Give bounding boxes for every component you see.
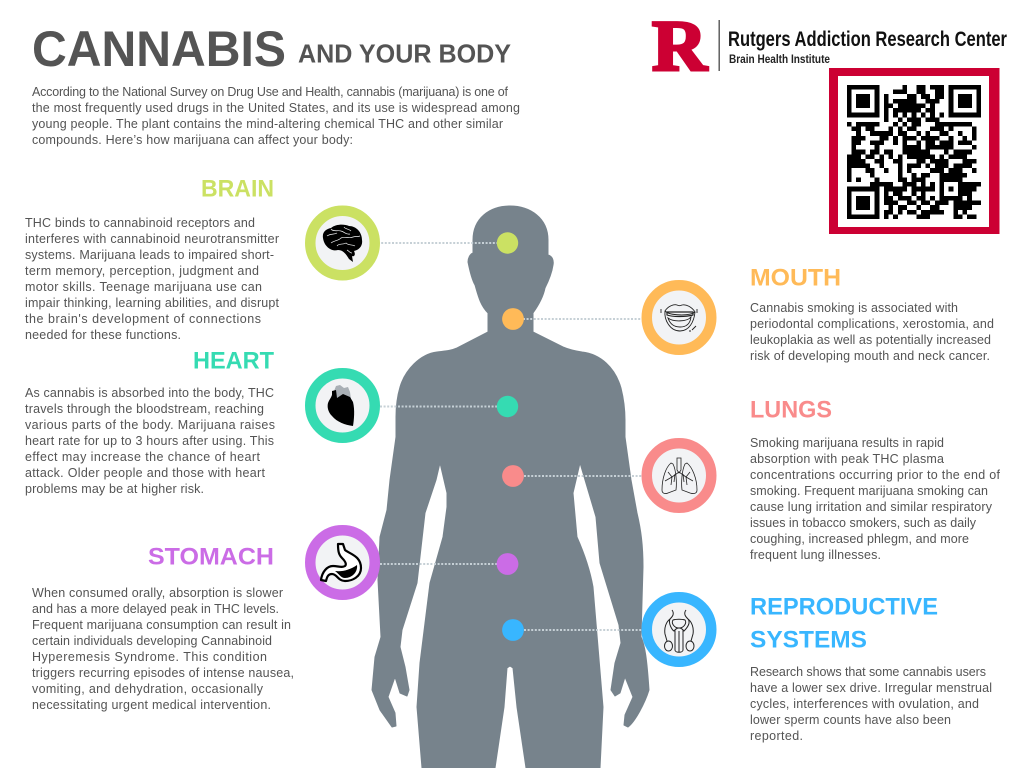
heading: mouth: MOUTH bbox=[750, 264, 841, 292]
title: AND YOUR BODY bbox=[298, 38, 511, 68]
text: heart: travels through the bloodstream, reaching bbox=[25, 402, 264, 416]
icon: mouth bbox=[647, 285, 711, 350]
intro text: compounds. Here’s how marijuana can affect your body: bbox=[32, 133, 353, 147]
text: brain: needed for these functions. bbox=[25, 328, 181, 342]
body marker: stomach bbox=[497, 553, 518, 575]
body marker: heart bbox=[497, 396, 518, 417]
text: brain: motor skills. Teenage marijuana use can bbox=[25, 280, 262, 294]
connector: mouth bbox=[523, 318, 642, 320]
intro text bbox=[32, 85, 520, 147]
text: lungs: absorption with peak THC plasma bbox=[750, 452, 944, 466]
text: lungs: smoking. Frequent marijuana smoking can bbox=[750, 484, 988, 498]
text: stomach bbox=[32, 586, 294, 712]
logo: Rutgers: Brain Health Institute bbox=[729, 52, 830, 66]
icon: brain bbox=[310, 211, 375, 275]
text: heart: problems may be at higher risk. bbox=[25, 482, 204, 496]
panel: brain bbox=[25, 176, 280, 342]
text: reproductive systems: Research shows that some cannabis users bbox=[750, 665, 986, 679]
text: lungs: issues in tobacco smokers, such as daily bbox=[750, 516, 977, 530]
text: brain: THC binds to cannabinoid receptors and bbox=[25, 216, 255, 230]
icon: heart bbox=[310, 373, 375, 438]
text: lungs: concentrations occurring prior to the end of bbox=[750, 468, 1001, 482]
text: mouth: leukoplakia as well as potentially increased bbox=[750, 333, 991, 347]
heading: stomach: STOMACH bbox=[148, 544, 274, 570]
text: heart: various parts of the body. Marijuana raises bbox=[25, 418, 275, 432]
heading: heart: HEART bbox=[193, 348, 274, 374]
connector: stomach bbox=[380, 563, 497, 565]
text: mouth bbox=[750, 301, 994, 363]
heading: reproductive systems: SYSTEMS bbox=[750, 626, 867, 654]
text: brain: term memory, perception, judgment and bbox=[25, 264, 259, 278]
text: mouth: Cannabis smoking is associated with bbox=[750, 301, 958, 315]
panel: lungs bbox=[750, 396, 1001, 562]
logo: Rutgers: R bbox=[652, 6, 708, 86]
body marker: brain bbox=[497, 232, 518, 254]
QR code bbox=[829, 68, 1000, 234]
body marker: lungs bbox=[502, 465, 524, 487]
heading: reproductive systems: REPRODUCTIVE bbox=[750, 594, 938, 620]
connector: heart bbox=[380, 406, 497, 408]
text: brain: systems. Marijuana leads to impaired short- bbox=[25, 248, 274, 262]
text: reproductive systems: cycles, interferences with ovulation, and bbox=[750, 697, 979, 711]
icon: reproductive bbox=[647, 597, 711, 662]
panel: stomach bbox=[32, 544, 294, 712]
text: heart: As cannabis is absorbed into the body, THC bbox=[25, 386, 274, 400]
text: reproductive systems: lower sperm counts have also been bbox=[750, 713, 951, 727]
text: reproductive systems: reported. bbox=[750, 729, 803, 743]
text: brain: the brain's development of connections bbox=[25, 312, 261, 326]
logo: Rutgers bbox=[652, 6, 1007, 86]
text: heart: effect may increase the chance of heart bbox=[25, 450, 261, 464]
text: stomach: Hyperemesis Syndrome. This condition bbox=[32, 650, 267, 664]
icon: stomach bbox=[310, 530, 375, 595]
panel: heart bbox=[25, 348, 275, 496]
text: lungs: coughing, increased phlegm, and more bbox=[750, 532, 969, 546]
text: stomach: necessitating urgent medical intervention. bbox=[32, 698, 271, 712]
panel: reproductive systems bbox=[750, 594, 992, 743]
text: stomach: When consumed orally, absorption is slower bbox=[32, 586, 283, 600]
text: reproductive systems: have a lower sex drive. Irregular menstrual bbox=[750, 681, 992, 695]
heading: lungs: LUNGS bbox=[750, 396, 832, 424]
panel: mouth bbox=[750, 264, 994, 363]
heading: reproductive systems bbox=[750, 594, 938, 654]
intro text: According to the National Survey on Drug Use and Health, cannabis (marijuana) is one of bbox=[32, 85, 509, 99]
text: stomach: triggers recurring episodes of intense nausea, bbox=[32, 666, 294, 680]
text: heart bbox=[25, 386, 275, 496]
text: lungs: cause lung irritation and similar respiratory bbox=[750, 500, 993, 514]
body silhouette bbox=[372, 206, 649, 768]
text: heart: heart rate for up to 3 hours after using. This bbox=[25, 434, 274, 448]
body marker: mouth bbox=[502, 308, 524, 330]
text: mouth: periodontal complications, xerostomia, and bbox=[750, 317, 994, 331]
connector: brain bbox=[313, 240, 497, 246]
connector: lungs bbox=[524, 475, 642, 477]
text: brain: impair thinking, learning abilities, and disrupt bbox=[25, 296, 280, 310]
intro text: the most frequently used drugs in the United States, and its use is widespread among bbox=[32, 101, 520, 115]
title bbox=[32, 21, 511, 77]
connector: reproductive bbox=[524, 629, 642, 631]
text: brain: interferes with cannabinoid neurotransmitter bbox=[25, 232, 279, 246]
intro text: young people. The plant contains the mind-altering chemical THC and other similar bbox=[32, 117, 503, 131]
text: mouth: risk of developing mouth and neck cancer. bbox=[750, 349, 990, 363]
text: reproductive systems bbox=[750, 665, 992, 743]
text: stomach: vomiting, and dehydration, occasionally bbox=[32, 682, 264, 696]
text: lungs: frequent lung illnesses. bbox=[750, 548, 881, 562]
icon: lungs bbox=[647, 443, 711, 508]
text: lungs: Smoking marijuana results in rapid bbox=[750, 436, 944, 450]
heading: brain: BRAIN bbox=[201, 176, 274, 202]
text: brain bbox=[25, 216, 280, 342]
text: heart: attack. Older people and those with heart bbox=[25, 466, 266, 480]
text: stomach: certain individuals developing Cannabinoid bbox=[32, 634, 272, 648]
text: stomach: Frequent marijuana consumption can result in bbox=[32, 618, 291, 632]
title: CANNABIS bbox=[32, 21, 286, 77]
text: lungs bbox=[750, 436, 1001, 562]
text: stomach: and has a more delayed peak in THC levels. bbox=[32, 602, 279, 616]
body marker: reproductive bbox=[502, 619, 524, 641]
